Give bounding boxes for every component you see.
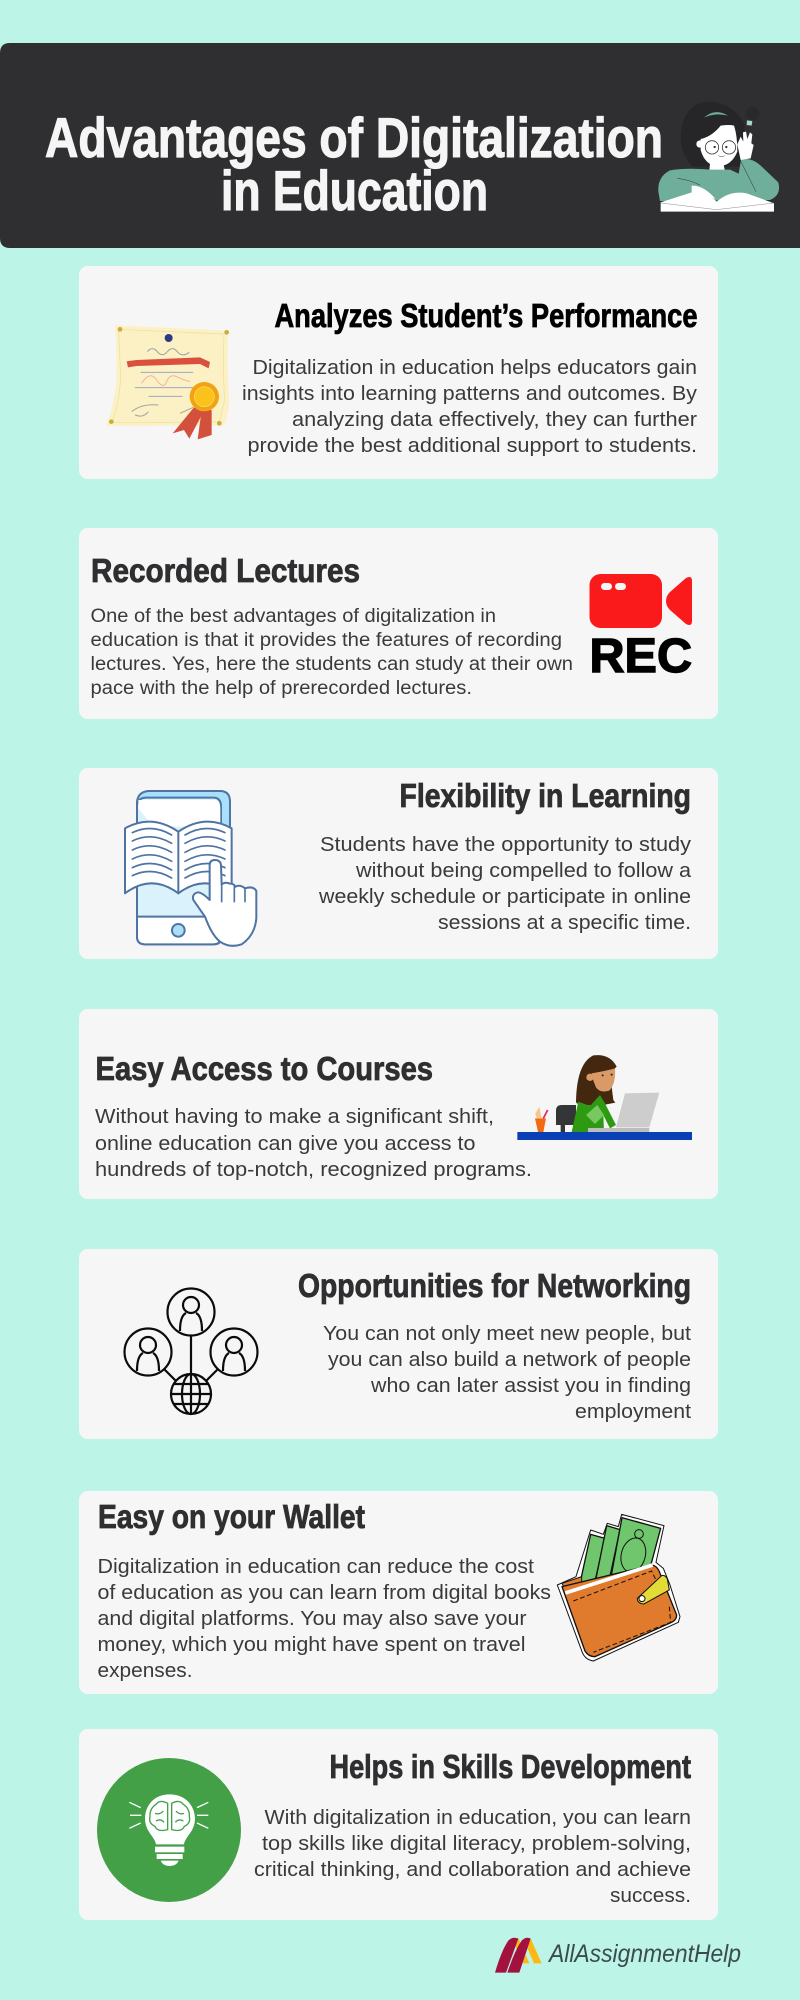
text block: and digital platforms. You may also save your	[98, 1607, 527, 1630]
heading: Easy Access to Courses	[96, 1050, 433, 1087]
brand logo: AllAssignmentHelp	[547, 1940, 741, 1968]
text block: Students have the opportunity to study	[320, 833, 692, 856]
text block: top skills like digital literacy, problem-solving,	[262, 1832, 691, 1855]
text block: analyzing data effectively, they can further	[292, 408, 697, 431]
text block: online education can give you access to	[95, 1132, 476, 1155]
title: Advantages of Digitalization	[45, 106, 663, 169]
icon: tablet with book and hand	[125, 791, 256, 946]
header banner	[0, 43, 800, 248]
panel: recorded lectures	[79, 528, 718, 719]
text block: Digitalization in education helps educators gain	[252, 356, 697, 379]
panel: easy on your wallet	[79, 1491, 718, 1694]
text block: expenses.	[98, 1659, 192, 1682]
icon: record camera: REC	[590, 630, 692, 683]
panel: opportunities for networking	[79, 1249, 718, 1439]
panel: easy access to courses	[79, 1009, 718, 1199]
icon: certificate	[106, 325, 229, 439]
text block: lectures. Yes, here the students can study at their own	[90, 654, 573, 675]
text block: critical thinking, and collaboration and achieve	[254, 1858, 691, 1881]
text block: weekly schedule or participate in online	[318, 885, 691, 908]
panel: analyzes student's performance	[79, 266, 718, 479]
text block	[318, 833, 692, 934]
text block: insights into learning patterns and outcomes. By	[242, 382, 698, 405]
brand logo	[495, 1938, 741, 1973]
heading: Opportunities for Networking	[298, 1267, 691, 1304]
icon: record camera	[590, 574, 692, 683]
text block: education is that it provides the features of recording	[90, 630, 562, 651]
icon: logo mark	[495, 1938, 542, 1973]
text block	[323, 1322, 691, 1423]
text block: success.	[610, 1884, 691, 1907]
heading: Easy on your Wallet	[98, 1498, 365, 1535]
heading: Recorded Lectures	[91, 552, 360, 589]
icon: network of people	[124, 1288, 258, 1414]
icon: lightbulb brain in green circle	[97, 1758, 241, 1902]
text block	[242, 356, 698, 457]
text block: employment	[575, 1400, 691, 1423]
text block: Without having to make a significant shift,	[95, 1105, 494, 1128]
text block: who can later assist you in finding	[370, 1374, 691, 1397]
text block: of education as you can learn from digital books	[98, 1581, 551, 1604]
text block: Digitalization in education can reduce the cost	[98, 1555, 534, 1578]
text block	[98, 1555, 551, 1682]
text block: With digitalization in education, you can learn	[264, 1806, 691, 1829]
text block: without being compelled to follow a	[355, 859, 692, 882]
text block: One of the best advantages of digitalization in	[90, 606, 496, 627]
title: in Education	[221, 159, 488, 222]
text block: pace with the help of prerecorded lectures.	[90, 678, 472, 699]
text block: sessions at a specific time.	[438, 911, 691, 934]
icon: student reading	[658, 102, 779, 212]
text block	[254, 1806, 691, 1907]
text block: you can also build a network of people	[328, 1348, 691, 1371]
heading: Helps in Skills Development	[330, 1748, 691, 1785]
heading: Flexibility in Learning	[400, 777, 691, 814]
title	[45, 106, 663, 222]
text block	[90, 606, 573, 699]
panel: flexibility in learning	[79, 768, 718, 959]
heading: Analyzes Student’s Performance	[274, 297, 698, 334]
icon: woman at laptop	[517, 1055, 692, 1140]
text block	[95, 1105, 532, 1181]
text block: money, which you might have spent on travel	[98, 1633, 526, 1656]
panel: helps in skills development	[79, 1729, 718, 1920]
text block: provide the best additional support to students.	[248, 434, 697, 457]
icon: wallet with cash	[557, 1514, 680, 1661]
text block: You can not only meet new people, but	[323, 1322, 691, 1345]
text block: hundreds of top-notch, recognized programs.	[95, 1158, 532, 1181]
